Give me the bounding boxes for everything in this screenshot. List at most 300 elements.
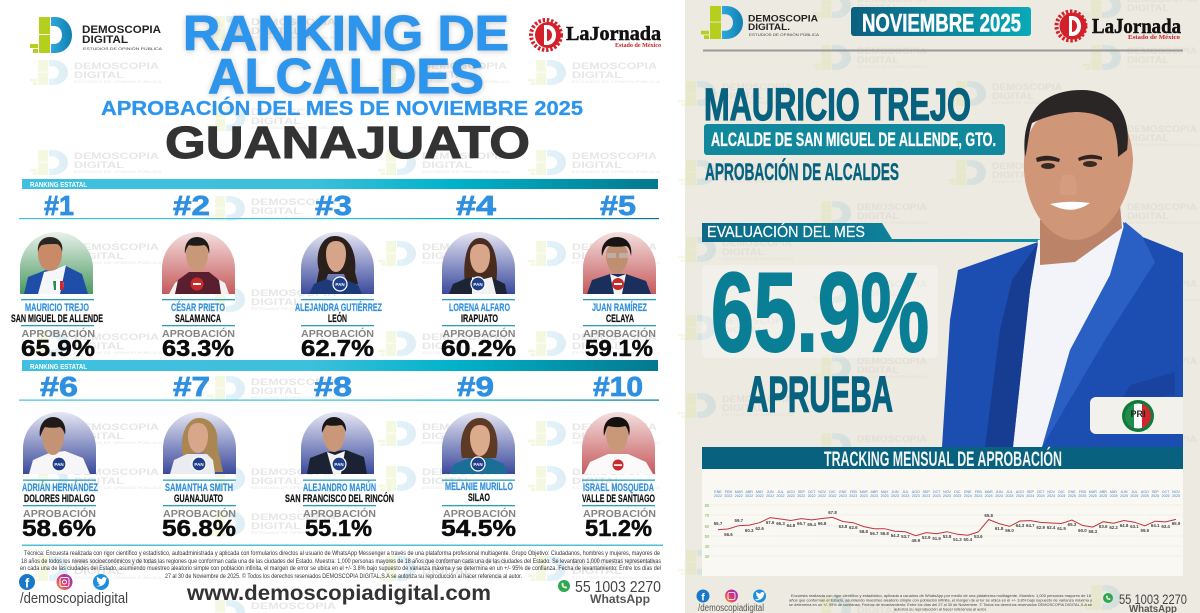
month axis: MAR <box>985 490 993 494</box>
party badge: PRI <box>1090 397 1183 434</box>
month axis: 2023 <box>953 494 961 498</box>
title <box>183 7 509 104</box>
approval figure: 65.9% <box>711 250 929 375</box>
right watermark pattern: DEMOSCOPIA <box>857 46 927 57</box>
data labels: 64.3 <box>1016 523 1025 528</box>
month axis: 2022 <box>808 494 816 498</box>
left watermark pattern: DIGITAL <box>74 341 124 352</box>
approval: 62.7% <box>301 335 374 361</box>
data labels: 59.0 <box>1005 528 1014 533</box>
methodology note: se determina en un +/- 95% de confianza. Fechas de levantamiento: Entre los días del 27 al 30 de Noviembre. © Todos los derechos reservados DEMOSCOPIA DIGITAL,S.A se <box>789 602 1092 607</box>
data labels: 62.6 <box>755 526 764 531</box>
left watermark pattern: DEMOSCOPIA <box>572 151 657 162</box>
left watermark pattern: DEMOSCOPIA <box>422 557 507 568</box>
month axis: 2024 <box>1047 494 1055 498</box>
card: rank 8 <box>285 371 394 541</box>
month axis: 2025 <box>1130 494 1138 498</box>
left watermark pattern: DEMOSCOPIA <box>251 601 336 612</box>
candidate role <box>704 124 1005 155</box>
data labels: 63.4 <box>1161 524 1170 529</box>
left watermark pattern: DEMOSCOPIA <box>572 422 657 433</box>
card: rank 1 <box>11 190 103 361</box>
card: rank 8: #8 <box>314 371 352 402</box>
whatsapp contact <box>558 579 661 606</box>
right watermark pattern: DIGITAL <box>857 365 899 376</box>
data labels: 63.6 <box>1099 524 1108 529</box>
left watermark pattern: DIGITAL <box>251 206 301 217</box>
portrait: Juan Ramírez <box>583 232 656 294</box>
approval <box>441 507 516 541</box>
y axis: 70 <box>705 513 710 518</box>
left watermark pattern: DIGITAL <box>74 160 124 171</box>
month axis: 2022 <box>828 494 836 498</box>
right watermark pattern: DIGITAL <box>857 3 899 14</box>
right watermark pattern: ESTUDIOS DE OPINIÓN PÚBLICA <box>857 64 930 69</box>
left watermark pattern: DEMOSCOPIA <box>251 288 336 299</box>
data labels: 63.8 <box>839 524 848 529</box>
data labels: 53.7 <box>901 534 910 539</box>
month axis: 2023 <box>870 494 878 498</box>
month axis: AGO <box>1016 490 1024 494</box>
title: ALCALDES <box>208 50 484 104</box>
data labels: 53.6 <box>974 534 983 539</box>
month axis: 2025 <box>1099 494 1107 498</box>
left watermark pattern: ESTUDIOS DE OPINIÓN PÚBLICA <box>572 169 661 174</box>
left watermark pattern: DIGITAL <box>422 160 472 171</box>
methodology note: años que conforman el Estado, asumiendo muestreo aleatorio simple con población infinita, el margen de error se ubica en el +/- 3.8% bajo supuesto de varianza máxima y <box>789 598 1092 602</box>
name: CELAYA <box>606 313 634 325</box>
left watermark pattern: ESTUDIOS DE OPINIÓN PÚBLICA <box>572 350 661 355</box>
data labels <box>714 510 1181 543</box>
data labels: 62.6 <box>849 525 858 530</box>
logo: Demoscopia Digital: DEMOSCOPIA <box>748 14 818 24</box>
right watermark pattern: DIGITAL <box>722 170 764 181</box>
month axis: 2025 <box>1162 494 1170 498</box>
month axis: JUL <box>1006 490 1013 494</box>
approval: APROBACIÓN <box>22 327 95 340</box>
month axis: 2025 <box>1141 494 1149 498</box>
portrait: Alejandra Gutiérrez: PAN <box>335 282 345 287</box>
month axis: 2023 <box>849 494 857 498</box>
month axis: 2022 <box>745 494 753 498</box>
data labels: 60.0 <box>1078 528 1087 533</box>
name: ALEJANDRA GUTIÉRREZ <box>295 301 382 314</box>
approval <box>162 327 235 361</box>
name <box>22 480 98 506</box>
right watermark pattern: DIGITAL <box>722 325 764 336</box>
approval <box>162 507 236 541</box>
left watermark pattern: DEMOSCOPIA <box>251 197 336 208</box>
right watermark pattern: DEMOSCOPIA <box>1127 124 1197 135</box>
left watermark pattern: DEMOSCOPIA <box>251 377 336 388</box>
right watermark pattern: DIGITAL <box>1127 211 1169 222</box>
right watermark pattern: ESTUDIOS DE OPINIÓN PÚBLICA <box>1127 220 1200 225</box>
month axis: 2022 <box>787 494 795 498</box>
left watermark pattern: DEMOSCOPIA <box>251 17 336 28</box>
chart panel <box>702 447 1183 576</box>
right watermark pattern: DEMOSCOPIA <box>992 82 1062 93</box>
left watermark pattern: DIGITAL <box>251 521 301 532</box>
month axis: 2025 <box>1110 494 1118 498</box>
left watermark pattern: DIGITAL <box>251 116 301 127</box>
card: rank 6: #6 <box>40 371 78 402</box>
card: rank 1: #1 <box>44 190 74 221</box>
month axis: OCT <box>1162 490 1169 494</box>
month axis: 2024 <box>1058 494 1066 498</box>
name: ADRIÁN HERNÁNDEZ <box>22 481 98 494</box>
month axis: AGO <box>787 490 795 494</box>
left watermark pattern: DIGITAL <box>572 566 622 577</box>
left watermark pattern: ESTUDIOS DE OPINIÓN PÚBLICA <box>422 575 511 580</box>
left watermark pattern: DIGITAL <box>422 476 472 487</box>
left watermark pattern: DIGITAL <box>74 70 124 81</box>
data labels: 65.4 <box>807 522 817 527</box>
data labels: 66.3 <box>776 521 785 526</box>
data labels: 54.3 <box>891 533 900 538</box>
logo: Demoscopia Digital <box>701 6 820 39</box>
month axis: ABR <box>871 490 878 494</box>
logo: La Jornada: Estado de México <box>1128 34 1180 41</box>
left watermark pattern: ESTUDIOS DE OPINIÓN PÚBLICA <box>251 485 340 490</box>
right watermark pattern: DIGITAL <box>992 170 1034 181</box>
left watermark pattern: ESTUDIOS DE OPINIÓN PÚBLICA <box>422 260 511 265</box>
right watermark pattern: DEMOSCOPIA <box>857 279 927 290</box>
methodology note: en cada una de las ciudades del Estado, asumiendo muestreo aleatorio simple con población infinita, el margen de error se ubica en el +/- 3.8% bajo supuesto de varianza máxima y se determina en un +/- 95% de confianza. Fecha de levantamiento: Entre los días del <box>20 566 661 572</box>
left watermark pattern: DEMOSCOPIA <box>422 61 507 72</box>
data labels: 65.8 <box>984 513 994 518</box>
right watermark pattern: DEMOSCOPIA <box>722 161 792 172</box>
y axis: 30 <box>705 554 710 559</box>
left watermark pattern: ESTUDIOS DE OPINIÓN PÚBLICA <box>251 125 340 130</box>
card: rank 9: #9 <box>457 371 494 402</box>
subtitle: APROBACIÓN DEL MES DE NOVIEMBRE 2025 <box>101 96 583 120</box>
approval <box>301 327 374 361</box>
logo: Demoscopia Digital: ESTUDIOS DE OPINIÓN PÚBLICA <box>749 32 820 37</box>
month axis: JUN <box>996 490 1003 494</box>
portrait: Israel Mosqueda <box>582 412 655 474</box>
month axis: 2025 <box>1151 494 1159 498</box>
right watermark pattern: ESTUDIOS DE OPINIÓN PÚBLICA <box>722 179 795 184</box>
data labels: 62.2 <box>1109 525 1118 530</box>
month axis: 2022 <box>724 494 732 498</box>
month axis: FEB <box>1079 490 1086 494</box>
left watermark pattern: DIGITAL <box>251 297 301 308</box>
approval: 51.2% <box>585 515 652 541</box>
month axis: 2022 <box>776 494 784 498</box>
left watermark pattern: DEMOSCOPIA <box>74 332 159 343</box>
left watermark pattern: ESTUDIOS DE OPINIÓN PÚBLICA <box>251 35 340 40</box>
month axis: JUN <box>767 490 774 494</box>
data labels: 62.4 <box>1047 525 1056 530</box>
data labels: 66.7 <box>797 521 806 526</box>
right watermark pattern: ESTUDIOS DE OPINIÓN PÚBLICA <box>857 220 930 225</box>
month axis: ENE <box>1068 490 1076 494</box>
approval: APROBACIÓN <box>301 327 374 340</box>
left watermark pattern: ESTUDIOS DE OPINIÓN PÚBLICA <box>572 79 661 84</box>
card: rank 4 <box>441 190 516 361</box>
methodology note: Técnica: Encuesta realizada con rigor científico y estadístico, autoadministrada y aplicada con formularios directos al usuario de WhatsApp Messenger a través de una plataforma profesional multiagente. Grupo Objetivo: Ciudadanos, hombres y mujeres, mayores de <box>24 551 661 557</box>
section heading: APROBACIÓN DE ALCALDES <box>705 158 899 186</box>
tab: evaluación del mes: EVALUACIÓN DEL MES <box>707 224 865 241</box>
month axis: 2024 <box>1006 494 1014 498</box>
right watermark pattern: ESTUDIOS DE OPINIÓN PÚBLICA <box>722 100 795 105</box>
social icons: /demoscopiadigital <box>20 591 128 607</box>
approval: 60.2% <box>441 335 516 361</box>
name <box>582 480 655 506</box>
whatsapp contact <box>1103 592 1187 613</box>
right watermark pattern: DEMOSCOPIA <box>1127 202 1197 213</box>
right watermark pattern: DEMOSCOPIA <box>1127 356 1197 367</box>
left watermark pattern: ESTUDIOS DE OPINIÓN PÚBLICA <box>572 485 661 490</box>
right watermark pattern: DIGITAL <box>722 91 764 102</box>
right watermark pattern: ESTUDIOS DE OPINIÓN PÚBLICA <box>1127 142 1200 147</box>
left watermark pattern: DIGITAL <box>74 476 124 487</box>
right watermark pattern: DIGITAL <box>1127 365 1169 376</box>
month axis: 2023 <box>912 494 920 498</box>
left watermark pattern: DIGITAL <box>572 160 622 171</box>
name: CÉSAR PRIETO <box>171 301 225 314</box>
candidate role: ALCALDE DE SAN MIGUEL DE ALLENDE, GTO. <box>711 130 996 151</box>
methodology note: autoriza su reproducción al hacer referencia al autor. <box>894 606 987 612</box>
right watermark pattern: ESTUDIOS DE OPINIÓN PÚBLICA <box>722 256 795 261</box>
left watermark pattern: DIGITAL <box>74 431 124 442</box>
left watermark pattern: DEMOSCOPIA <box>251 467 336 478</box>
date badge: NOVIEMBRE 2025 <box>862 10 1021 38</box>
left watermark pattern: ESTUDIOS DE OPINIÓN PÚBLICA <box>74 169 163 174</box>
month axis: AGO <box>912 490 920 494</box>
logo: Demoscopia Digital: DEMOSCOPIA <box>82 24 161 36</box>
right watermark pattern: DEMOSCOPIA <box>722 394 792 405</box>
right watermark pattern: ESTUDIOS DE OPINIÓN PÚBLICA <box>992 100 1065 105</box>
left watermark pattern: ESTUDIOS DE OPINIÓN PÚBLICA <box>74 260 163 265</box>
month axis <box>714 490 1180 498</box>
right watermark pattern: DIGITAL <box>1127 3 1169 14</box>
logo: La Jornada <box>531 20 661 50</box>
methodology note <box>789 593 1092 612</box>
left watermark pattern: DEMOSCOPIA <box>422 467 507 478</box>
portrait: Alejandro Marún: PAN <box>334 462 344 467</box>
approval <box>303 507 376 541</box>
month axis: NOV <box>943 490 951 494</box>
data labels: 49.9 <box>912 538 921 543</box>
right watermark pattern: ESTUDIOS DE OPINIÓN PÚBLICA <box>992 179 1065 184</box>
month axis: DIC <box>1058 490 1065 494</box>
left watermark pattern: ESTUDIOS DE OPINIÓN PÚBLICA <box>422 440 511 445</box>
portrait: Alejandro Marún <box>301 412 374 474</box>
month axis: 2022 <box>818 494 826 498</box>
name: MAURICIO TREJO <box>25 302 89 314</box>
data labels: 59.6 <box>1141 528 1150 533</box>
card: rank 7: #7 <box>173 371 210 402</box>
month axis: ABR <box>1100 490 1107 494</box>
tab: evaluación del mes <box>702 223 1042 242</box>
month axis: OCT <box>808 490 815 494</box>
card: rank 2 <box>162 190 235 361</box>
month axis: 2025 <box>1068 494 1076 498</box>
approval: 55.1% <box>305 515 372 541</box>
name <box>162 299 235 326</box>
month axis: 2022 <box>756 494 764 498</box>
logo: Demoscopia Digital <box>30 17 162 53</box>
data labels: 56.7 <box>870 531 879 536</box>
portrait: Melanie Murillo: PAN <box>473 462 483 467</box>
data labels: 50.4 <box>964 537 973 542</box>
name: VALLE DE SANTIAGO <box>582 493 655 505</box>
month axis: MAY <box>1110 490 1117 494</box>
month axis: ENE <box>964 490 971 494</box>
methodology note <box>20 551 661 580</box>
data labels: 58.8 <box>859 529 869 534</box>
month axis: SEP <box>1152 490 1159 494</box>
right watermark pattern: DIGITAL <box>857 211 899 222</box>
approval: 54.5% <box>441 515 516 541</box>
approval: APROBACIÓN <box>583 507 656 520</box>
data labels: 67.8 <box>828 510 837 515</box>
left watermark pattern: DEMOSCOPIA <box>74 61 159 72</box>
approval <box>22 507 96 541</box>
right watermark pattern: DEMOSCOPIA <box>1127 434 1197 445</box>
month axis: 2024 <box>985 494 993 498</box>
left watermark pattern: DEMOSCOPIA <box>422 151 507 162</box>
left watermark pattern: DEMOSCOPIA <box>422 422 507 433</box>
left watermark pattern: DEMOSCOPIA <box>572 61 657 72</box>
left watermark pattern: DIGITAL <box>74 251 124 262</box>
month axis: ABR <box>746 490 753 494</box>
card: rank 5 <box>583 190 656 361</box>
line series <box>718 517 1176 536</box>
card: rank 10 <box>582 371 656 541</box>
month axis: MAR <box>735 490 743 494</box>
approval: APROBACIÓN <box>163 507 236 520</box>
right watermark pattern: ESTUDIOS DE OPINIÓN PÚBLICA <box>857 374 930 379</box>
left watermark pattern: ESTUDIOS DE OPINIÓN PÚBLICA <box>422 350 511 355</box>
logo: La Jornada: LaJornada <box>1092 14 1181 38</box>
logo: La Jornada: Estado de México <box>615 43 661 49</box>
month axis: JUN <box>1120 490 1128 494</box>
portrait: Adrián Hernández: PAN <box>54 462 64 467</box>
party badge: PRI: PRI <box>1130 409 1146 419</box>
data labels: 55.7 <box>714 521 723 526</box>
month axis: MAY <box>756 490 763 494</box>
y axis: 50 <box>705 534 710 539</box>
logo: Demoscopia Digital: ESTUDIOS DE OPINIÓN PÚBLICA <box>83 46 162 51</box>
month axis: JUL <box>1131 490 1138 494</box>
name: LEÓN <box>328 312 347 325</box>
month axis: FEB <box>725 490 732 494</box>
left watermark pattern: ESTUDIOS DE OPINIÓN PÚBLICA <box>74 440 163 445</box>
left watermark pattern: ESTUDIOS DE OPINIÓN PÚBLICA <box>74 485 163 490</box>
card: rank 2: #2 <box>173 190 210 221</box>
data labels: 62.9 <box>1036 525 1046 530</box>
data labels: 65.3 <box>1068 522 1077 527</box>
name <box>11 299 103 326</box>
month axis: NOV <box>1172 490 1180 494</box>
month axis: 2024 <box>974 494 982 498</box>
portrait: Samantha Smith <box>163 412 236 474</box>
right watermark pattern: DEMOSCOPIA <box>722 316 792 327</box>
data labels: 56.6 <box>724 532 733 537</box>
data labels: 64.8 <box>787 523 796 528</box>
left watermark pattern: DEMOSCOPIA <box>572 467 657 478</box>
ranking bar 1 <box>22 179 658 189</box>
left watermark pattern: DIGITAL <box>422 566 472 577</box>
month axis: 2024 <box>1016 494 1024 498</box>
month axis: JUL <box>777 490 784 494</box>
left watermark pattern: ESTUDIOS DE OPINIÓN PÚBLICA <box>422 169 511 174</box>
month axis: JUN <box>892 490 898 494</box>
left watermark pattern: DEMOSCOPIA <box>251 512 336 523</box>
left watermark pattern: DEMOSCOPIA <box>572 242 657 253</box>
left watermark pattern: DIGITAL <box>251 386 301 397</box>
panel: Mauricio Trejo profile <box>696 6 1187 613</box>
month axis: 2023 <box>922 494 930 498</box>
card: rank 10: #10 <box>593 371 643 402</box>
month axis: MAR <box>1089 490 1097 494</box>
left watermark pattern: DIGITAL <box>422 70 472 81</box>
month axis: MAR <box>860 490 868 494</box>
approval: 59.1% <box>585 335 653 361</box>
approval label: APRUEBA <box>747 366 893 422</box>
data labels: 53.8 <box>943 534 952 539</box>
right watermark pattern: DIGITAL <box>857 55 899 66</box>
month axis: DIC <box>954 490 961 494</box>
whatsapp contact: 55 1003 2270 <box>1119 592 1187 607</box>
left watermark pattern: ESTUDIOS DE OPINIÓN PÚBLICA <box>572 440 661 445</box>
left watermark pattern: DEMOSCOPIA <box>251 107 336 118</box>
month axis: 2025 <box>1172 494 1180 498</box>
left watermark pattern <box>30 16 661 613</box>
logo: La Jornada: LaJornada <box>566 23 661 45</box>
right watermark pattern: DIGITAL <box>857 288 899 299</box>
month axis: 2023 <box>933 494 941 498</box>
ranking bar 2: RANKING ESTATAL <box>30 362 87 371</box>
logo: La Jornada <box>1056 12 1181 41</box>
data labels: 66.8 <box>818 521 827 526</box>
approval: APROBACIÓN <box>23 507 96 520</box>
name <box>583 299 656 326</box>
portrait: Lorena Alfaro: PAN <box>473 282 483 287</box>
logo: Demoscopia Digital: DIGITAL <box>82 34 128 46</box>
portrait: Lorena Alfaro <box>442 232 515 294</box>
right watermark pattern: DIGITAL <box>1127 133 1169 144</box>
chart header <box>702 447 1183 471</box>
data labels: 63.1 <box>1130 524 1139 529</box>
right watermark pattern: DIGITAL <box>1127 55 1169 66</box>
left watermark pattern: ESTUDIOS DE OPINIÓN PÚBLICA <box>251 215 340 220</box>
methodology note: 18 años de todos los niveles socioeconómicos y de todas las regiones que conforman cada una de las ciudades del Estado. Muestra: 1,000 personas mayores de 18 años que conforman cada una de las ciudades del Estado. Se levantaron 1,000 muestras representativas <box>21 559 661 565</box>
month axis: NOV <box>818 490 826 494</box>
month axis: DIC <box>829 490 836 494</box>
approval: 58.6% <box>22 515 96 541</box>
month axis: 2024 <box>1037 494 1045 498</box>
y axis <box>705 503 710 559</box>
title: RANKING DE <box>183 7 509 61</box>
month axis: SEP <box>798 490 805 494</box>
y axis: 60 <box>705 524 710 529</box>
month axis: 2022 <box>735 494 743 498</box>
approval <box>583 327 656 361</box>
right watermark pattern: DEMOSCOPIA <box>1127 46 1197 57</box>
approval <box>441 327 516 361</box>
methodology note: Encuesta realizada con rigor científico y estadístico, aplicada a usuarios de WhatsApp por medio de una plataforma multiagente. Muestra: 1,000 personas mayores de 18 <box>791 593 1091 598</box>
month axis: NOV <box>1047 490 1055 494</box>
name: SAN FRANCISCO DEL RINCÓN <box>285 492 394 505</box>
right watermark pattern: ESTUDIOS DE OPINIÓN PÚBLICA <box>722 412 795 417</box>
right watermark pattern: ESTUDIOS DE OPINIÓN PÚBLICA <box>1127 297 1200 302</box>
data labels: 58.3 <box>1089 529 1098 534</box>
data labels: 61.8 <box>995 526 1004 531</box>
portrait: Adrián Hernández <box>23 412 96 474</box>
